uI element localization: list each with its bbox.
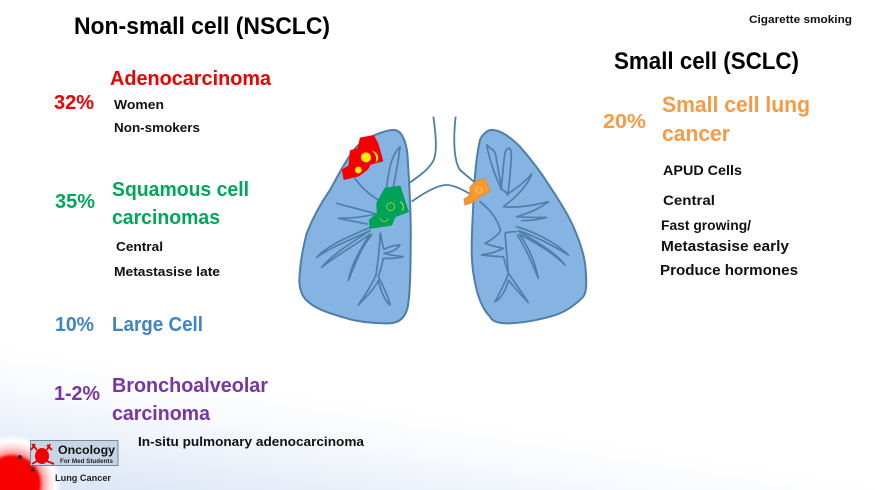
panel: small cell lung cancer: Central [663, 192, 715, 208]
panel: small cell lung cancer: APUD Cells [663, 162, 742, 178]
panel: squamous cell carcinomas: carcinomas [112, 207, 220, 229]
panel: squamous cell carcinomas: Central [116, 239, 163, 254]
panel: adenocarcinoma: 32% [54, 92, 94, 114]
panel: bronchoalveolar carcinoma: 1-2% [54, 383, 100, 405]
panel: large cell: 10% [55, 314, 94, 336]
logo: oncology for med students [30, 440, 118, 466]
panel: small cell lung cancer [603, 92, 810, 279]
label: cigarette smoking: Cigarette smoking [749, 14, 852, 26]
icon: crab [31, 444, 54, 464]
panel: adenocarcinoma: Adenocarcinoma [110, 68, 272, 90]
panel: adenocarcinoma: Non-smokers [114, 120, 200, 135]
icon: red blob corner [0, 434, 62, 490]
panel: bronchoalveolar carcinoma [54, 375, 365, 449]
panel: bronchoalveolar carcinoma: carcinoma [112, 403, 211, 425]
panel: small cell lung cancer: Produce hormones [660, 262, 798, 279]
left lung [299, 130, 411, 323]
panel: squamous cell carcinomas: Squamous cell [112, 179, 249, 201]
title: non-small cell: Non-small cell (NSCLC) [74, 13, 330, 40]
left lung airways [317, 147, 403, 305]
tumour: small cell [464, 178, 490, 205]
tumour: squamous cell [369, 186, 408, 228]
panel: large cell: Large Cell [112, 314, 203, 336]
panel: large cell [55, 314, 203, 336]
panel: squamous cell carcinomas [55, 179, 249, 279]
panel: bronchoalveolar carcinoma: Bronchoalveolar [112, 375, 268, 397]
panel: small cell lung cancer: Fast growing/ [661, 217, 751, 233]
label: lung cancer: Lung Cancer [55, 473, 111, 484]
panel: small cell lung cancer: 20% [603, 111, 646, 133]
panel: squamous cell carcinomas: Metastasise late [114, 264, 220, 279]
title: small cell: Small cell (SCLC) [614, 48, 799, 75]
panel: small cell lung cancer: Small cell lung [662, 92, 810, 117]
panel: bronchoalveolar carcinoma: In-situ pulmonary adenocarcinoma [138, 434, 365, 449]
logo: oncology for med students: For Med Students [60, 458, 113, 465]
right lung airways [480, 145, 568, 303]
right lung [472, 130, 586, 323]
logo: oncology for med students: Oncology [58, 443, 115, 457]
panel: squamous cell carcinomas: 35% [55, 191, 95, 213]
tumour: adenocarcinoma [343, 136, 382, 179]
panel: small cell lung cancer: Metastasise early [661, 238, 790, 255]
panel: adenocarcinoma [54, 68, 272, 135]
diagram: lungs [299, 117, 586, 323]
panel: adenocarcinoma: Women [114, 97, 164, 112]
panel: small cell lung cancer: cancer [662, 121, 730, 146]
trachea and bronchi [402, 117, 475, 202]
